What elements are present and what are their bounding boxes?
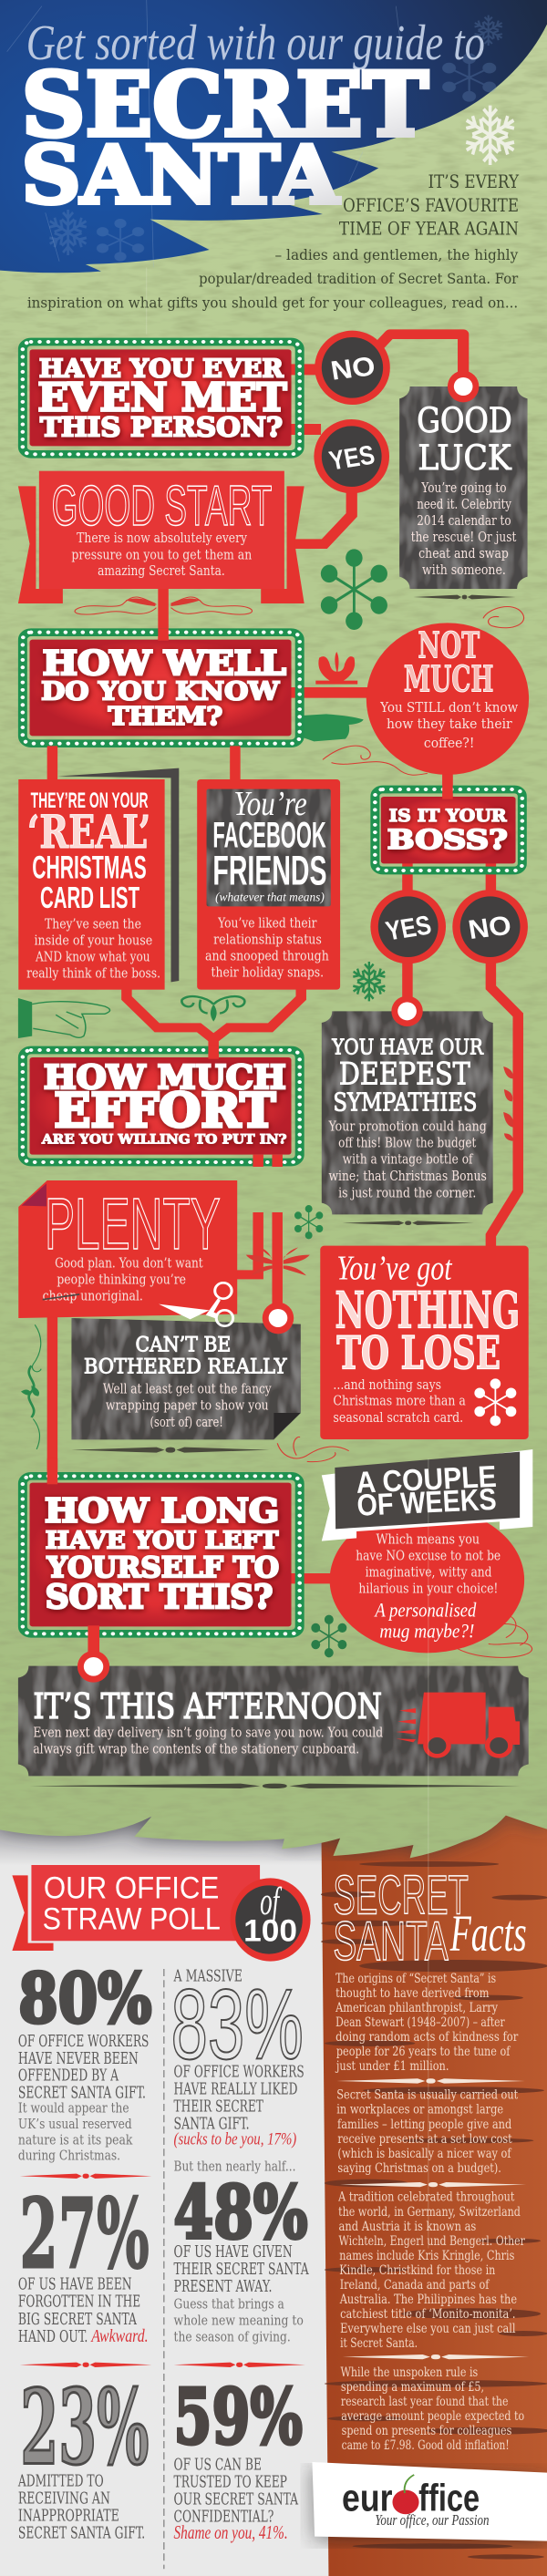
stat: 80%: SECRET SANTA GIFT. <box>18 2083 146 2102</box>
stat: 83%: 83% <box>170 1969 304 2080</box>
nothing to lose text: seasonal scratch card. <box>333 1409 463 1426</box>
good luck text: You’re going to <box>421 479 507 496</box>
couple of weeks text: Which means you <box>376 1530 480 1547</box>
connector: question 1 to answers <box>290 369 321 429</box>
connectors: how well to answers <box>52 746 235 781</box>
heading: can't be bothered really <box>84 1332 287 1378</box>
stat: 59% <box>174 2374 303 2543</box>
badge: of 100: 100 <box>243 1913 297 1948</box>
panel: facebook friends <box>197 779 340 990</box>
tile 3 <box>18 746 528 1367</box>
sympathies text: is just round the corner. <box>338 1184 476 1200</box>
not much text: coffee?! <box>424 735 474 751</box>
afternoon text: always gift wrap the contents of the stationery cupboard. <box>33 1740 359 1757</box>
panel: facebook friends: FACEBOOK <box>212 815 326 856</box>
heading: real christmas card list <box>27 788 150 914</box>
heading: plenty: PLENTY <box>45 1183 221 1265</box>
faint flakes in the sky <box>46 15 504 262</box>
title: SECRET SANTA <box>22 53 428 222</box>
panel: is it your boss <box>375 789 522 871</box>
nothing to lose text: Christmas more than a <box>333 1393 466 1408</box>
answer bubble: yes <box>314 419 389 493</box>
answer bubble: yes <box>370 890 446 963</box>
heading: not much <box>404 624 493 700</box>
badge: of 100: of <box>260 1880 283 1923</box>
logo card: euroffice: Your office, our Passion <box>375 2511 489 2530</box>
heading: real christmas card list: ‘REAL’ <box>27 805 150 859</box>
logo card: euroffice: eur <box>342 2476 392 2519</box>
connector: not much to boss <box>442 768 453 799</box>
heading: real christmas card list: CHRISTMAS <box>32 850 147 886</box>
couple of weeks text: mug maybe?! <box>379 1621 474 1643</box>
connectors: how much to answers <box>233 1212 258 1274</box>
icon: green flake <box>311 1615 346 1657</box>
blue night sky tree shape <box>0 0 547 273</box>
panel: how well do you know them: DO YOU KNOW <box>41 675 280 706</box>
good luck text: cheat and swap <box>418 545 509 562</box>
answer bubble: no: NO <box>328 350 377 386</box>
title: SECRET SANTA: SECRET <box>22 53 428 157</box>
plenty text <box>43 1255 203 1303</box>
heading: you have our deepest sympathies: DEEPEST <box>339 1057 470 1092</box>
stat: 23% <box>17 2366 149 2542</box>
facts paragraph 3: Ireland, Canada and parts of <box>340 2277 490 2293</box>
connector: no to nothing to lose <box>490 962 518 1249</box>
stat: 80%: UK’s usual reserved <box>18 2116 132 2132</box>
heading: good luck <box>417 402 512 478</box>
facebook friends text: You’ve liked their <box>217 915 317 931</box>
connector ring <box>263 1303 294 1334</box>
icon: red fleur <box>315 652 357 685</box>
good luck text: with someone. <box>422 562 506 578</box>
flourish behind bauble <box>457 1613 532 1657</box>
stat: 27%: BIG SECRET SANTA <box>18 2309 138 2329</box>
facts paragraph 1: thought to have derived from <box>335 1985 489 2001</box>
flourish: under not much bauble <box>323 746 428 775</box>
heading: it's this afternoon: IT’S THIS AFTERNOON <box>33 1686 382 1726</box>
stat: 59%: OF US CAN BE <box>174 2455 262 2474</box>
not much text: how they take their <box>387 716 512 732</box>
stat: 23%: ADMITTED TO <box>17 2471 104 2490</box>
stat: 83%: (sucks to be you, 17%) <box>174 2130 296 2148</box>
stat: 83%: HAVE REALLY LIKED <box>174 2079 297 2098</box>
answer bubble: no: NO <box>466 910 513 945</box>
couple of weeks text: A personalised <box>374 1600 476 1622</box>
stat: 48%: OF US HAVE GIVEN <box>174 2241 293 2262</box>
badge: of 100 <box>231 1878 311 1962</box>
sympathies text: off this! Blow the budget <box>338 1135 477 1150</box>
answer bubble: yes: YES <box>383 910 434 946</box>
icon: small green flake <box>294 1205 323 1239</box>
stat: 83%: But then nearly half... <box>174 2159 295 2174</box>
panel: how long have you left: YOURSELF TO <box>46 1551 279 1583</box>
connector: how long to answers <box>290 1563 335 1594</box>
bothered text <box>103 1380 272 1430</box>
panel: how long have you left <box>23 1476 300 1633</box>
panel: how well do you know them: HOW WELL <box>43 644 286 683</box>
panel: how well do you know them: THEM? <box>108 701 222 730</box>
panel: is it your boss: IS IT YOUR <box>389 805 507 826</box>
flourish: top of not much bauble <box>483 607 524 628</box>
stat: 27% <box>18 2177 150 2346</box>
logo card: euroffice: ffice <box>418 2476 480 2519</box>
stat: 83%: SANTA GIFT. <box>174 2114 250 2133</box>
stat: 80%: OFFENDED BY A <box>18 2066 119 2085</box>
stat: 83% <box>170 1966 304 2174</box>
intro text <box>27 171 520 312</box>
card list text: AND know what you <box>35 949 150 964</box>
heading: good luck: LUCK <box>418 439 511 478</box>
heading: you're facebook friends: FRIENDS <box>212 849 327 894</box>
stat: 59%: CONFIDENTIAL? <box>174 2507 274 2526</box>
card list text <box>26 915 160 981</box>
facts paragraph 1: just under £1 million. <box>335 2058 449 2074</box>
connector: plenty to sign <box>47 1315 57 1486</box>
a couple of weeks banner: A COUPLE <box>355 1459 498 1499</box>
connector: yes to good start <box>290 486 352 544</box>
tile 5 <box>18 1449 532 1788</box>
facebook friends text: and snooped through <box>205 948 329 963</box>
couple of weeks text: imaginative, witty and <box>366 1563 492 1580</box>
good luck text <box>411 479 517 578</box>
stat: 80% <box>18 1959 151 2163</box>
tag ring <box>77 1651 109 1683</box>
panel: how much effort <box>23 1050 300 1162</box>
facts paragraph 3: and Austria it is known as <box>339 2219 476 2234</box>
plenty text: cheap unoriginal. <box>43 1288 143 1303</box>
panel: how much effort: HOW MUCH <box>44 1058 286 1097</box>
paper background: poll section <box>0 1793 349 2576</box>
tag ring <box>391 996 423 1026</box>
title: SECRET SANTA: SANTA <box>22 129 340 222</box>
bothered text: Well at least get out the fancy <box>103 1380 272 1396</box>
icon: green snowflake <box>351 962 387 1001</box>
a couple of weeks banner <box>322 1449 532 1541</box>
stat: 27%: FORGOTTEN IN THE <box>18 2292 140 2311</box>
stat: 59%: 59% <box>174 2374 303 2462</box>
sympathies text <box>328 1118 487 1200</box>
stat: 80%: OF OFFICE WORKERS <box>18 2031 149 2051</box>
connector: good start to how well <box>158 586 169 641</box>
heading: you have our deepest sympathies: YOU HAVE OUR <box>332 1035 484 1060</box>
panel: have you ever even met this person: EVEN MET <box>37 376 287 420</box>
sky scratches <box>7 0 401 267</box>
panel: how long have you left: HAVE YOU LEFT <box>46 1526 279 1554</box>
panel: nothing to lose <box>320 1246 529 1439</box>
plenty text: people thinking you’re <box>57 1272 186 1287</box>
answer bubble: no <box>452 890 528 963</box>
heading: not much: NOT <box>418 624 480 666</box>
panel: how long have you left: SORT THIS? <box>46 1578 273 1615</box>
panel: plenty note <box>18 1180 237 1318</box>
panel: have you ever even met this person: HAVE YOU EVER <box>39 353 284 383</box>
stat: 27%: Awkward. <box>90 2325 149 2346</box>
stat: 59%: Shame on you, 41%. <box>174 2521 288 2543</box>
stat: 48%: the season of giving. <box>174 2328 291 2344</box>
logo card: euroffice <box>312 2462 547 2541</box>
card list text: inside of your house <box>34 933 152 948</box>
icon: white snowflake <box>462 106 518 165</box>
heading: good luck: GOOD <box>417 402 512 440</box>
heading: you're facebook friends: You’re <box>233 784 307 822</box>
panel: have you ever even met this person <box>23 342 300 454</box>
good start text: amazing Secret Santa. <box>98 562 225 579</box>
heading: you're facebook friends <box>212 784 327 904</box>
stat: 48% <box>174 2170 309 2344</box>
tile 2 <box>18 331 529 799</box>
afternoon text: Even next day delivery isn’t going to save you now. You could <box>33 1725 383 1740</box>
stat: 80%: HAVE NEVER BEEN <box>18 2048 139 2068</box>
facts paragraph 4: While the unspoken rule is <box>340 2365 478 2380</box>
facebook friends text: their holiday snaps. <box>212 964 324 980</box>
fold lines <box>147 267 428 2249</box>
icon: delivery truck <box>396 1693 520 1757</box>
panel: good luck tag <box>399 371 528 589</box>
green textured paper background <box>0 0 547 1858</box>
card list text: really think of the boss. <box>26 965 160 981</box>
heading: you've got nothing to lose <box>335 1248 520 1380</box>
tag ring <box>448 371 479 402</box>
answer bubble: no <box>315 331 390 405</box>
answer bubble: yes: YES <box>326 439 377 476</box>
stat: 27%: HAND OUT. <box>18 2326 88 2346</box>
stat: 48%: Guess that brings a <box>174 2295 284 2312</box>
heading: secret santa facts <box>333 1864 527 1972</box>
stat: 59%: TRUSTED TO KEEP <box>174 2472 287 2491</box>
facts paragraph 4: spending a maximum of £5, <box>341 2379 484 2395</box>
facebook friends text: relationship status <box>213 932 322 947</box>
stat: 48%: THEIR SECRET SANTA <box>174 2259 309 2279</box>
brown background: facts section <box>321 1793 547 2576</box>
red flourish <box>75 597 253 614</box>
facts paragraph 1 <box>335 1971 519 2074</box>
heading: good start: GOOD START <box>52 475 272 538</box>
heading: our office straw poll <box>43 1870 221 1936</box>
facts paragraph 3: it Secret Santa. <box>340 2335 418 2351</box>
panel: is it your boss: BOSS? <box>387 825 508 855</box>
not much text <box>379 699 518 751</box>
tile 6 <box>12 1864 527 2569</box>
heading: our office straw poll: STRAW POLL <box>43 1901 221 1936</box>
panel: christmas card list <box>18 768 179 990</box>
heading: secret santa facts: SANTA <box>333 1910 449 1972</box>
heading: can't be bothered really: BOTHERED REALLY <box>84 1354 287 1378</box>
red ornament on connector <box>503 1066 513 1141</box>
bothered text: (sort of) care! <box>150 1414 223 1430</box>
heading: real christmas card list: CARD LIST <box>40 881 139 914</box>
stat: 83%: THEIR SECRET <box>174 2097 263 2116</box>
icon: outlined pointing hand <box>18 998 110 1038</box>
shadow of green tree <box>0 1808 547 1858</box>
green ornament <box>181 996 244 1022</box>
stat: 83%: A MASSIVE <box>173 1966 243 1985</box>
red flourish above banner <box>277 1437 349 1462</box>
icon: scissors <box>159 1283 233 1326</box>
heading: you've got nothing to lose: You’ve got <box>336 1248 453 1287</box>
stat: 23%: RECEIVING AN <box>18 2488 110 2508</box>
couple of weeks text <box>356 1530 501 1643</box>
panel: can't be bothered <box>71 1318 301 1439</box>
panel: it's this afternoon <box>18 1651 529 1776</box>
icon: green flake <box>321 549 387 630</box>
tile 7 <box>17 2170 547 2545</box>
afternoon text <box>33 1725 383 1757</box>
panel: not much bauble <box>366 623 529 775</box>
logo shadow <box>312 2468 547 2545</box>
red leaf ornament <box>246 1247 310 1275</box>
tile 7: 23% <box>20 2366 149 2488</box>
facts paragraph 2 <box>336 2087 518 2176</box>
stat: 23%: INAPPROPRIATE <box>18 2506 119 2525</box>
stat: 48%: whole new meaning to <box>174 2312 304 2328</box>
tile 7: 27% <box>19 2177 150 2291</box>
stat: 48%: PRESENT AWAY. <box>174 2276 272 2296</box>
stat: 83%: OF OFFICE WORKERS <box>174 2062 304 2081</box>
connector: answers to how much <box>127 989 301 1059</box>
heading: you have our deepest sympathies: SYMPATHIES <box>333 1087 477 1117</box>
bothered text: wrapping paper to show you <box>106 1397 269 1413</box>
icon: green pointing hand <box>302 714 364 741</box>
tile 4 <box>18 1180 529 1486</box>
good start text <box>71 530 253 579</box>
heading: you have our deepest sympathies <box>332 1035 484 1117</box>
connector: how well to not much <box>290 687 373 698</box>
connectors: boss to answers <box>408 861 490 1000</box>
stat: 23%: SECRET SANTA GIFT. <box>18 2523 145 2542</box>
stat: 80%: It would appear the <box>18 2100 129 2116</box>
a couple of weeks banner: OF WEEKS <box>356 1482 498 1522</box>
good start text: There is now absolutely every <box>77 530 247 546</box>
connector: no to good luck <box>378 335 463 374</box>
heading: real christmas card list: THEY’RE ON YOUR <box>31 788 149 813</box>
header <box>0 0 547 312</box>
sympathies text: Your promotion could hang <box>328 1118 487 1134</box>
stat: 27%: OF US HAVE BEEN <box>18 2274 132 2293</box>
panel: have you ever even met this person: THIS PERSON? <box>40 412 283 443</box>
stat: 80%: during Christmas. <box>18 2147 120 2163</box>
green vertical ornament <box>21 1324 41 1449</box>
panel: a couple of weeks bauble <box>322 1449 532 1653</box>
panel: straw poll heading <box>12 1865 311 1962</box>
panel: good start ribbon <box>18 471 304 603</box>
panel: how well do you know them <box>23 633 300 744</box>
card back <box>57 768 179 982</box>
stat: 48%: 48% <box>174 2170 307 2255</box>
heading: you're facebook friends: (whatever that means) <box>215 891 325 904</box>
stat: 80%: nature is at its peak <box>18 2131 133 2148</box>
divider column <box>162 1969 165 2569</box>
nothing to lose text <box>333 1376 466 1426</box>
heading: can't be bothered really: CAN’T BE <box>135 1332 231 1356</box>
heading: our office straw poll: OUR OFFICE <box>44 1870 219 1905</box>
panel: how much effort: ARE YOU WILLING TO PUT IN? <box>41 1132 287 1147</box>
facebook friends text <box>205 915 329 980</box>
nothing to lose text: ...and nothing says <box>333 1376 441 1393</box>
card list text: They’ve seen the <box>45 915 141 932</box>
facts paragraph 3 <box>337 2189 525 2351</box>
panel: how much effort: EFFORT <box>54 1084 275 1139</box>
stat: 80%: 80% <box>18 1959 151 2039</box>
panel: how long have you left: HOW LONG <box>45 1492 279 1530</box>
facts paragraph 4 <box>340 2365 524 2453</box>
stat: 59%: OUR SECRET SANTA <box>174 2489 299 2509</box>
panel: deepest sympathies tag <box>322 996 493 1214</box>
icon: white flake <box>474 1378 516 1426</box>
good start text: pressure on you to get them an <box>71 546 253 562</box>
plenty text: Good plan. You don’t want <box>55 1255 203 1271</box>
sympathies text: with a vintage bottle of <box>343 1151 474 1167</box>
